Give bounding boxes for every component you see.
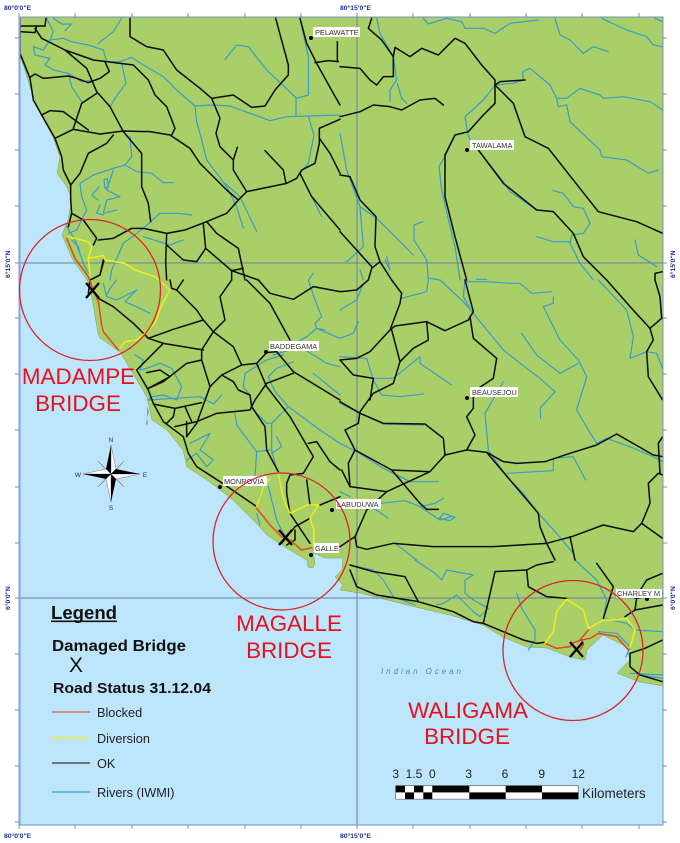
- scale bar: 3: [465, 767, 472, 781]
- label: Madampe Bridge: BRIDGE: [35, 391, 121, 416]
- scale bar: 12: [572, 767, 585, 781]
- label: Waligama Bridge: WALIGAMA: [408, 698, 528, 723]
- scale bar: 9: [538, 767, 545, 781]
- place: Tawalama: TAWALAMA: [472, 141, 512, 150]
- place: Galle: [309, 543, 339, 557]
- legend: damaged bridge: X: [69, 654, 83, 677]
- place: Baddegama: BADDEGAMA: [270, 342, 317, 351]
- label: Magalle Bridge: [236, 611, 342, 663]
- scale bar: Kilometers: [582, 786, 646, 801]
- damaged bridge marker: Waligama: [570, 642, 583, 657]
- place: Monrovia: MONROVIA: [224, 477, 264, 486]
- scale bar: 3: [392, 767, 399, 781]
- label: Madampe Bridge: [22, 364, 135, 416]
- legend title: Legend: [51, 602, 117, 623]
- coordinate labels: 80°0'0"E: [4, 4, 32, 12]
- scale bar: 0: [429, 767, 436, 781]
- legend: damaged bridge: [52, 638, 186, 677]
- legend: rivers: [52, 786, 175, 800]
- damaged bridge marker: Magalle: [279, 530, 292, 545]
- place: Monrovia: [218, 476, 267, 489]
- legend: diversion: [52, 732, 150, 746]
- circle: Waligama: [503, 580, 643, 720]
- rivers: [33, 18, 663, 678]
- place: Pelawatte: [309, 27, 360, 40]
- place: Beausejou: [465, 387, 518, 400]
- legend: blocked: [52, 706, 142, 720]
- place: Labuduwa: [330, 499, 381, 512]
- icon: compass rose: E: [143, 472, 148, 479]
- legend: road status heading: Road Status 31.12.04: [53, 681, 211, 697]
- place: Charley M: CHARLEY M: [617, 589, 660, 598]
- place: Labuduwa: LABUDUWA: [337, 500, 379, 509]
- land: [19, 17, 663, 686]
- place: Baddegama: [264, 341, 319, 354]
- coordinate labels: 6°15'0"N: [669, 250, 677, 278]
- place: Galle: GALLE: [315, 544, 339, 553]
- scale bar: 1.5: [406, 767, 423, 781]
- circle: Madampe: [20, 220, 160, 360]
- roads: blocked: [67, 238, 628, 650]
- place: Pelawatte: PELAWATTE: [315, 28, 359, 37]
- coordinate labels: 80°15'0"E: [340, 832, 371, 840]
- roads: diversion: [68, 237, 635, 647]
- coordinate labels: 6°0'0"N: [4, 586, 12, 610]
- icon: compass rose: W: [75, 472, 82, 479]
- coordinate labels: 80°0'0"E: [4, 832, 32, 840]
- legend: damaged bridge: Damaged Bridge: [52, 638, 186, 655]
- scale bar: 6: [502, 767, 509, 781]
- coordinate labels: 80°15'0"E: [340, 4, 371, 12]
- coordinate labels: 6°0'0"N: [669, 586, 677, 610]
- circle: Magalle: [213, 473, 350, 610]
- label: Indian Ocean: Indian Ocean: [381, 667, 462, 676]
- icon: compass rose: N: [109, 437, 114, 444]
- legend: OK: OK: [97, 757, 116, 771]
- label: Magalle Bridge: MAGALLE: [236, 611, 342, 636]
- scale bar: [392, 767, 646, 801]
- damaged bridge marker: Madampe: [86, 283, 99, 298]
- legend: rivers: Rivers (IWMI): [97, 786, 175, 800]
- roads: OK: [20, 18, 663, 682]
- legend: [51, 602, 211, 800]
- legend: OK: [52, 757, 116, 771]
- place: Tawalama: [465, 140, 514, 152]
- label: Madampe Bridge: MADAMPE: [22, 364, 135, 389]
- legend: diversion: Diversion: [97, 732, 150, 746]
- label: Waligama Bridge: BRIDGE: [424, 724, 510, 749]
- legend: blocked: Blocked: [97, 706, 142, 720]
- icon: compass rose: [75, 437, 148, 512]
- label: Waligama Bridge: [408, 698, 528, 749]
- coordinate labels: 6°15'0"N: [4, 250, 12, 278]
- label: Magalle Bridge: BRIDGE: [246, 638, 332, 663]
- icon: compass rose: S: [109, 505, 114, 512]
- place: Beausejou: BEAUSEJOU: [472, 388, 517, 397]
